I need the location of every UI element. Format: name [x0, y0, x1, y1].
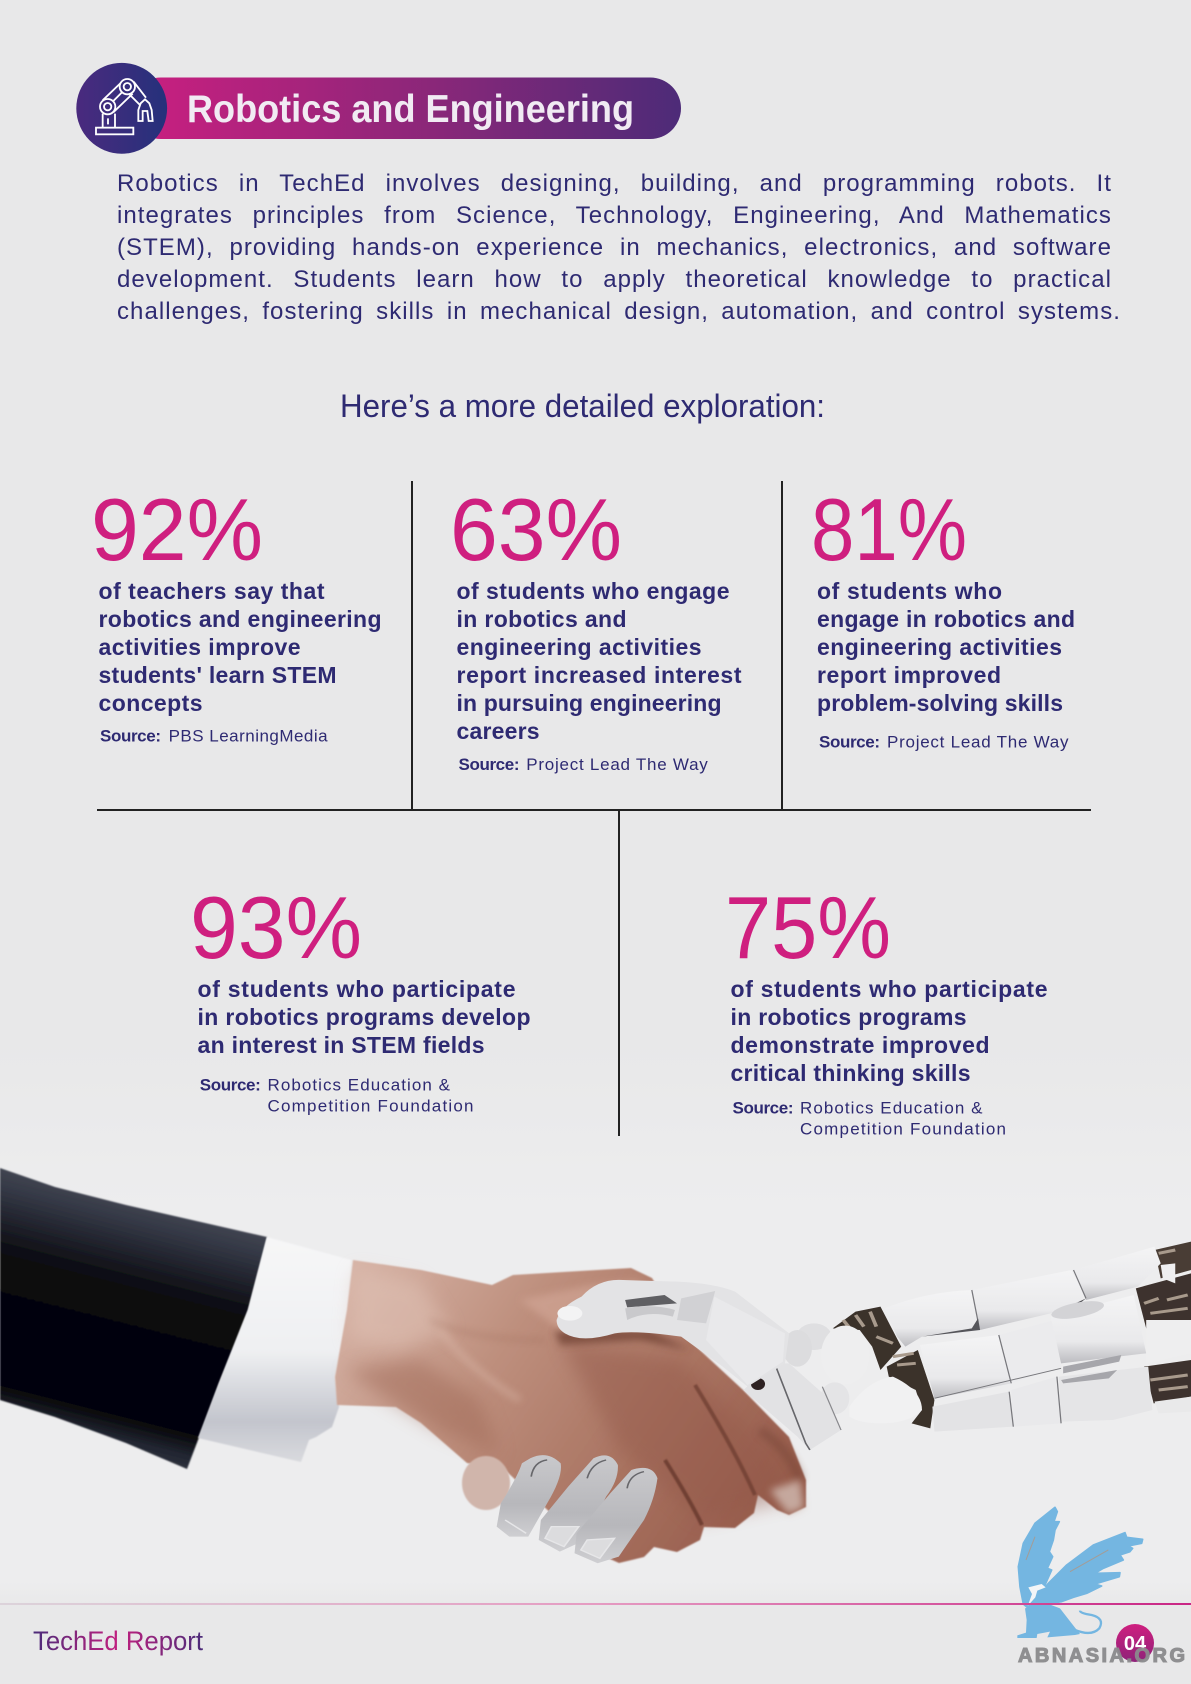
intro paragraph — [117, 170, 1121, 325]
description: engineering activities — [817, 634, 1062, 660]
banner title: Robotics and Engineering — [187, 88, 634, 131]
description: an interest in STEM fields — [198, 1032, 484, 1058]
description: of students who participate — [198, 976, 516, 1002]
source: Robotics Education & — [268, 1076, 451, 1094]
description — [456, 578, 742, 744]
robot wrist block — [743, 1363, 841, 1450]
suit sleeve — [0, 1168, 267, 1469]
intro paragraph: (STEM), providing hands-on experience in mechanics, electronics, and software — [117, 234, 1112, 261]
knuckle joints — [797, 1323, 831, 1350]
description — [730, 976, 1048, 1086]
description: problem-solving skills — [817, 690, 1063, 716]
description: of students who participate — [730, 976, 1048, 1002]
footer label: TechEd Report — [33, 1626, 203, 1656]
source: Robotics Education & — [800, 1098, 983, 1118]
source — [100, 726, 328, 746]
description: of students who engage — [456, 578, 730, 604]
description: activities improve — [98, 634, 300, 660]
source: Source: — [732, 1098, 794, 1118]
value: 63% — [450, 480, 622, 579]
description: robotics and engineering — [98, 606, 382, 632]
description — [198, 976, 530, 1058]
footer rule — [0, 1603, 1191, 1605]
description: of teachers say that — [98, 578, 325, 604]
description: in robotics and — [456, 606, 626, 632]
intro paragraph: challenges, fostering skills in mechanical design, automation, and control systems. — [117, 298, 1121, 325]
source — [732, 1098, 1006, 1138]
mechanical joints — [833, 1307, 901, 1370]
source — [200, 1076, 474, 1116]
description: in pursuing engineering — [456, 690, 722, 716]
source: Competition Foundation — [800, 1120, 1006, 1138]
value: 75% — [725, 878, 891, 977]
description: report improved — [817, 662, 1001, 688]
page number badge: 04 — [1124, 1633, 1147, 1655]
header banner — [76, 63, 681, 154]
shirt cuff — [198, 1237, 351, 1462]
source: Source: — [100, 726, 161, 746]
source: PBS LearningMedia — [169, 726, 328, 746]
description: in robotics programs — [730, 1004, 966, 1030]
stat card: 63% — [450, 480, 742, 774]
source: Project Lead The Way — [526, 755, 708, 774]
forearm shells — [885, 1290, 978, 1347]
source: Source: — [458, 755, 520, 774]
intro paragraph: Robotics in TechEd involves designing, building, and programming robots. It — [117, 170, 1112, 197]
value: 81% — [811, 480, 967, 579]
watermark text: ABNASIA.ORG — [1018, 1645, 1185, 1667]
intro paragraph: development. Students learn how to apply theoretical knowledge to practical — [117, 266, 1112, 293]
description: careers — [456, 718, 540, 744]
description: demonstrate improved — [730, 1032, 990, 1058]
stat card: 75% — [725, 878, 1048, 1138]
description: in robotics programs develop — [198, 1004, 530, 1030]
description: concepts — [98, 690, 202, 716]
description: students' learn STEM — [98, 662, 336, 688]
source: Project Lead The Way — [887, 732, 1069, 752]
stat card: 92% — [91, 480, 382, 746]
subheading: Here’s a more detailed exploration: — [340, 388, 825, 424]
stat card: 81% — [811, 480, 1075, 752]
page number badge — [1116, 1624, 1154, 1662]
icon circle with robot arm — [76, 63, 167, 154]
description — [98, 578, 382, 716]
banner pill — [130, 78, 681, 139]
source: Source: — [819, 732, 880, 752]
description: engineering activities — [456, 634, 702, 660]
description: report increased interest — [456, 662, 742, 688]
human hand — [335, 1260, 806, 1563]
robot fingers — [497, 1455, 657, 1563]
robot arm and hand — [557, 1242, 1191, 1450]
stat card: 93% — [190, 878, 530, 1116]
robot palm and thumb — [557, 1280, 789, 1387]
description: critical thinking skills — [730, 1060, 970, 1086]
source: Source: — [200, 1076, 261, 1094]
description: engage in robotics and — [817, 606, 1075, 632]
intro paragraph: integrates principles from Science, Technology, Engineering, And Mathematics — [117, 202, 1112, 229]
description — [817, 578, 1075, 716]
grid divider lines — [97, 481, 1091, 1136]
description: of students who — [817, 578, 1002, 604]
value: 92% — [91, 480, 263, 579]
value: 93% — [190, 878, 362, 977]
source: Competition Foundation — [268, 1096, 474, 1116]
